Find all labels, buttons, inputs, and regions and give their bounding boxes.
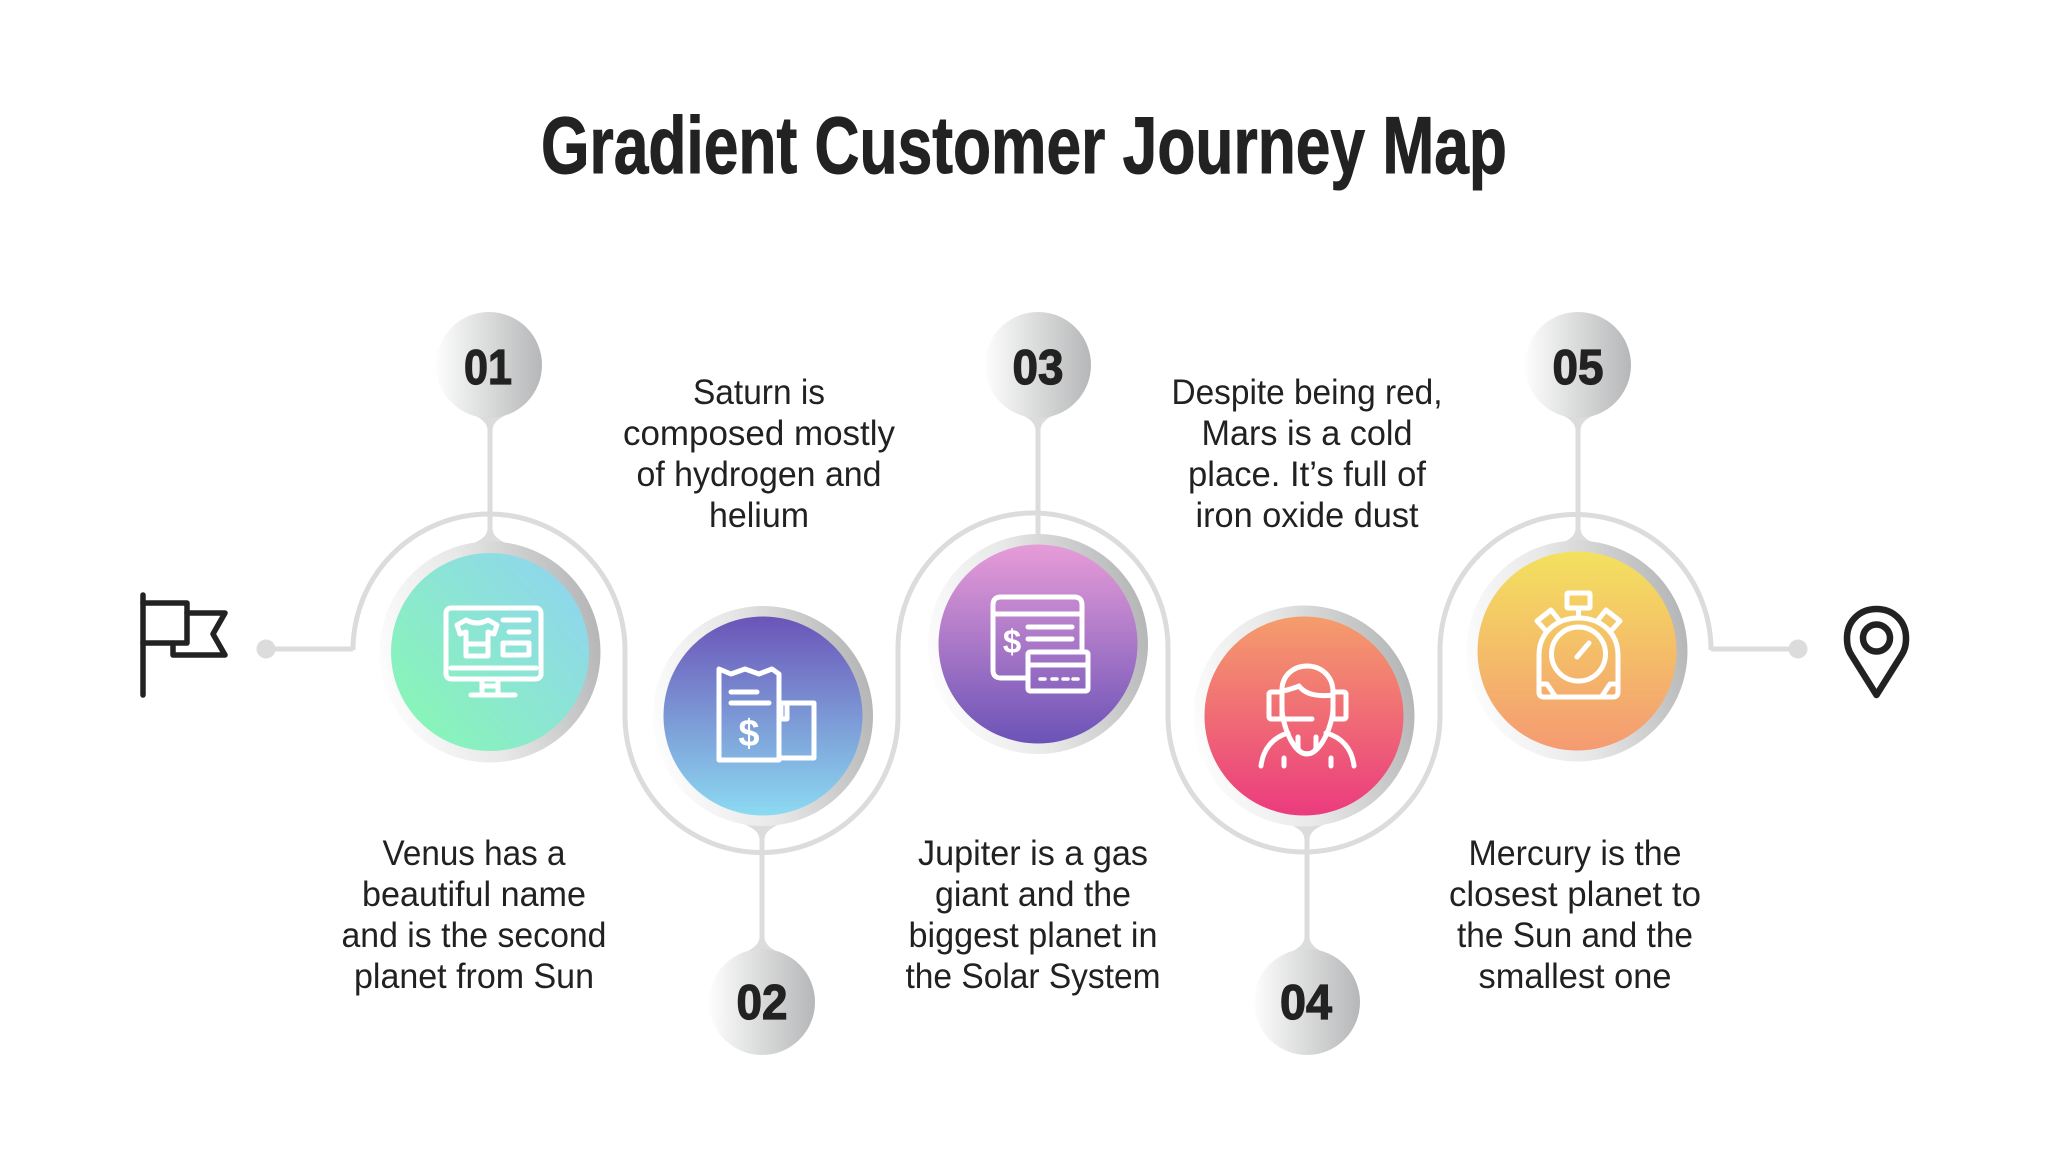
step 01 text: beautiful name: [362, 875, 586, 914]
step 01 number badge: [436, 312, 542, 512]
step 01 text: Venus has a: [382, 834, 566, 873]
step 01 text: planet from Sun: [354, 957, 594, 996]
step 02 text: Saturn is: [693, 373, 825, 412]
step 02 medallion: [653, 606, 873, 852]
step 05 medallion: [1466, 512, 1688, 762]
step 03 text: [906, 834, 1160, 996]
step 02 text: helium: [709, 496, 809, 535]
step 04: [1172, 373, 1442, 1055]
step 01 medallion: [380, 512, 600, 762]
step 02 text: [623, 373, 895, 535]
step 05 number badge: [1525, 312, 1631, 512]
step 03 number badge: [985, 312, 1091, 514]
icon: receipt and parcel: $: [738, 713, 760, 755]
step 03 text: Jupiter is a gas: [918, 834, 1148, 873]
step 04 text: place. It’s full of: [1188, 455, 1426, 494]
step 03 text: giant and the: [935, 875, 1131, 914]
step 03 number badge: 03: [1012, 341, 1064, 395]
step 04 text: [1172, 373, 1442, 535]
step 03 text: biggest planet in: [908, 916, 1158, 955]
step 01 text: and is the second: [342, 916, 606, 955]
step 02 text: of hydrogen and: [636, 455, 882, 494]
step 03 text: the Solar System: [906, 957, 1160, 996]
step 05 text: [1449, 834, 1701, 996]
step 04 medallion: [1194, 606, 1414, 852]
icon: start flag: [143, 595, 225, 695]
icon: online shop monitor: [446, 608, 541, 695]
step 04 text: Despite being red,: [1172, 373, 1442, 412]
step 01 number badge: 01: [464, 341, 512, 395]
step 05 text: smallest one: [1478, 957, 1672, 996]
step 05 text: Mercury is the: [1468, 834, 1682, 873]
title: Gradient Customer Journey Map: [541, 101, 1507, 191]
step 02 number badge: 02: [736, 976, 788, 1030]
step 04 text: Mars is a cold: [1202, 414, 1412, 453]
step 05: [1449, 312, 1701, 996]
step 03 medallion: [928, 512, 1148, 754]
step 05 number badge: 05: [1552, 341, 1604, 395]
step 05 text: closest planet to: [1449, 875, 1701, 914]
icon: destination pin: [1847, 609, 1906, 695]
step 04 number badge: 04: [1280, 976, 1332, 1030]
icon: customer support agent: [1261, 666, 1354, 766]
icon: payment window and card: [993, 597, 1088, 691]
icon: stopwatch: [1537, 593, 1620, 697]
icon: payment window and card: $: [1003, 623, 1021, 660]
step 04 number badge: [1254, 852, 1360, 1055]
step 01 text: [342, 834, 606, 996]
step 05 text: the Sun and the: [1457, 916, 1693, 955]
step 03: [906, 312, 1160, 996]
step 02: [623, 373, 895, 1055]
step 02 text: composed mostly: [623, 414, 895, 453]
step 02 number badge: [709, 852, 815, 1055]
icon: receipt and parcel: [719, 669, 814, 760]
step 04 text: iron oxide dust: [1196, 496, 1419, 535]
step 01: [342, 312, 606, 996]
journey path connector: [256, 513, 1808, 852]
